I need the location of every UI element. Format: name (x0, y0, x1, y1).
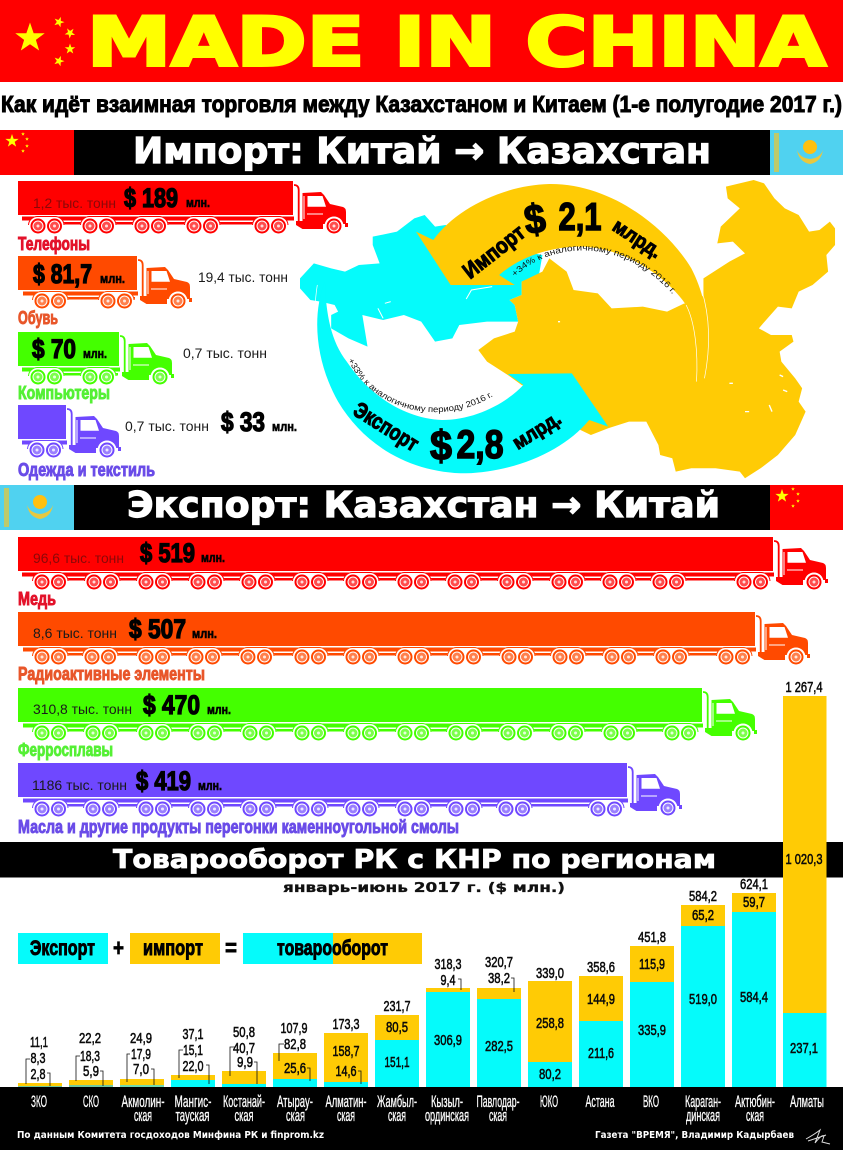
truck: clothing (18, 405, 297, 480)
region labels: ская (746, 1106, 764, 1125)
bar: Атырауская: 25,6 (284, 1061, 306, 1077)
bar: Карагандинская: 65,2 (692, 908, 714, 924)
bar: Жамбылская (375, 999, 419, 1087)
region labels: Акмолин- (122, 1092, 164, 1111)
region labels: ская (286, 1106, 305, 1125)
region labels: ская (489, 1106, 507, 1125)
bar: Алматинская: 14,6 (336, 1064, 356, 1080)
label: footwear: Обувь (18, 308, 58, 328)
region labels: ская (337, 1106, 355, 1125)
bar: Жамбылская: 231,7 (384, 999, 410, 1015)
truck: clothing: 0,7 тыс. тонн (125, 419, 209, 434)
bar: ВКО: 335,9 (638, 1023, 666, 1039)
bar chart (18, 680, 826, 1087)
export amount: Экспорт (349, 397, 424, 456)
truck: computers: млн. (83, 346, 107, 361)
bar: ВКО: 451,8 (638, 930, 666, 946)
import amount: 2,1 (558, 196, 602, 239)
turnover band (0, 842, 843, 878)
truck: radioactive elements: млн. (192, 626, 217, 641)
arrow: export (317, 282, 608, 473)
truck: oils: $ 419 (136, 766, 191, 796)
bar: Карагандинская: 584,2 (689, 889, 717, 905)
truck: phones: млн. (186, 195, 210, 210)
region labels: ЮКО (540, 1092, 558, 1111)
region labels (31, 1092, 824, 1125)
label: clothing: Одежда и текстиль (18, 460, 155, 480)
truck: phones: $ 189 (124, 183, 178, 213)
bar: Мангистауская (171, 1027, 215, 1087)
map: China (478, 180, 835, 478)
legend: = (225, 935, 237, 962)
bar: Карагандинская (681, 889, 725, 1087)
bar: Астана: 211,6 (588, 1046, 614, 1062)
label: computers: Компьютеры (18, 383, 110, 403)
truck: computers (18, 332, 267, 403)
region labels: Мангис- (174, 1092, 212, 1111)
bar: Алматинская (324, 1017, 368, 1087)
bar: Павлодарская: 38,2 (488, 971, 510, 987)
truck: ferroalloys: млн. (207, 702, 231, 717)
truck: copper: 96,6 тыс. тонн (33, 551, 124, 566)
region labels: Алматин- (326, 1092, 366, 1111)
bar: Павлодарская: 282,5 (485, 1039, 513, 1055)
bar: Костанайская: 9,9 (237, 1055, 253, 1071)
bar: Кызылординская: 9,4 (440, 973, 456, 989)
truck: ferroalloys: $ 470 (143, 690, 200, 720)
bar: Актюбинская: 624,1 (740, 877, 768, 893)
bar: ЮКО: 339,0 (536, 966, 564, 982)
bar: Атырауская (273, 1021, 317, 1087)
truck: radioactive elements: 8,6 тыс. тонн (33, 626, 117, 641)
bar: Алматы: 1 267,4 (786, 680, 822, 696)
region labels: ская (134, 1106, 152, 1125)
bar: Акмолинская: 7,0 (133, 1062, 149, 1078)
import amount: $ (521, 195, 549, 243)
truck: copper (18, 537, 828, 609)
bar: Актюбинская: 59,7 (743, 895, 765, 911)
bar: Атырауская: 82,8 (284, 1037, 306, 1053)
signature (806, 1130, 830, 1144)
bar: Павлодарская (477, 955, 521, 1087)
region labels: ская (388, 1106, 406, 1125)
truck: clothing: млн. (272, 419, 297, 434)
bar: Астана: 358,6 (587, 960, 615, 976)
legend: Экспорт (30, 937, 95, 960)
truck: oils: 1186 тыс. тонн (32, 778, 127, 793)
truck: ferroalloys (18, 688, 757, 760)
credit: Газета "ВРЕМЯ", Владимир Кадырбаев (595, 1130, 794, 1141)
bar: Костанайская: 50,8 (233, 1025, 255, 1041)
region labels: Жамбыл- (377, 1092, 417, 1111)
export amount (349, 397, 565, 469)
import amount: млрд. (608, 215, 666, 263)
region labels: ВКО (643, 1092, 659, 1111)
bar: Мангистауская: 22,0 (182, 1059, 204, 1075)
period subtitle: январь-июнь 2017 г. ($ млн.) (283, 881, 565, 896)
bar: ЗКО (18, 1035, 62, 1087)
bar: Акмолинская: 17,9 (131, 1047, 151, 1063)
bar: ЗКО: 8,3 (30, 1051, 46, 1067)
truck: ferroalloys: 310,8 тыс. тонн (33, 702, 132, 717)
import amount (458, 195, 666, 284)
bar: ВКО (630, 930, 674, 1087)
region labels: Астана (586, 1092, 615, 1111)
bar: СКО: 22,2 (79, 1031, 101, 1047)
region labels: Атырау- (277, 1092, 313, 1111)
bar: СКО (69, 1031, 113, 1087)
bar: Костанайская: 40,7 (233, 1041, 255, 1057)
arrow: import (416, 184, 708, 383)
map: Kazakhstan (300, 215, 542, 347)
region labels: тауская (176, 1106, 210, 1125)
bar: СКО: 5,9 (83, 1064, 99, 1080)
legend: импорт (143, 937, 203, 960)
bar: Астана (579, 960, 623, 1087)
bar: Жамбылская: 151,1 (384, 1055, 410, 1071)
region labels: Павлодар- (476, 1092, 520, 1111)
region labels: СКО (83, 1092, 99, 1111)
label: ferroalloys: Ферросплавы (18, 740, 113, 760)
truck: footwear: млн. (100, 271, 125, 286)
label: oils: Масла и другие продукты перегонки каменноугольной смолы (18, 817, 459, 837)
bar: Кызылординская: 306,9 (434, 1033, 462, 1049)
export amount: 2,8 (456, 423, 504, 467)
truck: radioactive elements: $ 507 (129, 614, 186, 644)
bar: Алматы: 1 020,3 (786, 852, 822, 868)
region labels: динская (686, 1106, 720, 1125)
bar: СКО: 18,3 (80, 1049, 100, 1065)
region labels: Караган- (685, 1092, 721, 1111)
truck: phones: 1,2 тыс. тонн (33, 196, 116, 211)
header banner (0, 0, 843, 82)
map: Kazakhstan and China with arrows (300, 180, 836, 478)
turnover heading: Товарооборот РК с КНР по регионам (113, 845, 716, 875)
bar: Павлодарская: 320,7 (485, 955, 513, 971)
region labels: Актюбин- (735, 1092, 775, 1111)
truck: copper: млн. (201, 550, 225, 565)
export amount: млрд. (509, 408, 565, 454)
bar: ЮКО (528, 966, 572, 1087)
icon: flag stars (15, 15, 78, 67)
bar: Алматинская: 173,3 (332, 1017, 360, 1033)
import heading: Импорт: Китай → Казахстан (133, 131, 711, 172)
legend (18, 933, 422, 964)
truck: footwear (18, 256, 288, 328)
bar: ЗКО: 2,8 (30, 1067, 46, 1083)
bar: Кызылординская: 318,3 (434, 957, 462, 973)
bar: Алматы: 237,1 (790, 1041, 818, 1057)
bar: Атырауская: 107,9 (280, 1021, 308, 1037)
export amount: $ (430, 422, 452, 469)
export growth note: +33% к аналогичному периоду 2016 г. (350, 359, 492, 414)
label: copper: Медь (18, 589, 56, 609)
bar: Костанайская (222, 1025, 266, 1087)
bar: Актюбинская (732, 877, 776, 1087)
bar: Жамбылская: 80,5 (386, 1020, 408, 1036)
bar: Кызылординская (426, 957, 470, 1087)
bar: Астана: 144,9 (587, 992, 615, 1008)
bar: Алматы (783, 680, 826, 1087)
truck: clothing: $ 33 (221, 407, 265, 437)
legend: + (113, 935, 124, 962)
footer band (0, 1087, 843, 1150)
truck: phones (18, 181, 348, 254)
export band (0, 485, 843, 530)
bar: Карагандинская: 519,0 (689, 992, 717, 1008)
bar: ЗКО: 11,1 (30, 1035, 48, 1051)
region labels: ЗКО (31, 1092, 47, 1111)
bar: Мангистауская: 15,1 (183, 1043, 203, 1059)
bar: ВКО: 115,9 (639, 957, 665, 973)
truck: footwear: $ 81,7 (33, 259, 92, 289)
source note: По данным Комитета госдоходов Минфина РК и finprom.kz (17, 1130, 324, 1141)
import amount: Импорт (458, 219, 530, 284)
bar: ЮКО: 80,2 (539, 1067, 561, 1083)
truck: footwear: 19,4 тыс. тонн (198, 270, 288, 285)
bar: Акмолинская: 24,9 (130, 1031, 152, 1047)
legend: товарооборот (277, 937, 388, 960)
label: phones: Телефоны (18, 234, 90, 254)
region labels: ская (234, 1106, 254, 1125)
bar: Мангистауская: 37,1 (182, 1027, 204, 1043)
region labels: ординская (425, 1106, 469, 1125)
truck: computers: $ 70 (32, 334, 76, 364)
import band (0, 130, 843, 175)
bar: Акмолинская (120, 1031, 164, 1087)
bar: Алматинская: 158,7 (332, 1044, 360, 1060)
bar: Актюбинская: 584,4 (740, 990, 768, 1006)
truck: computers: 0,7 тыс. тонн (183, 346, 267, 361)
bar: ЮКО: 258,8 (536, 1016, 564, 1032)
region labels: Костанай- (223, 1092, 265, 1111)
import growth note: +34% к аналогичному периоду 2016 г. (513, 246, 675, 294)
title: MADE IN CHINA (87, 4, 826, 82)
region labels: Кызыл- (431, 1092, 463, 1111)
truck: oils (18, 763, 682, 837)
truck: oils: млн. (198, 778, 222, 793)
label: radioactive elements: Радиоактивные элементы (18, 664, 205, 684)
export heading: Экспорт: Казахстан → Китай (127, 485, 720, 526)
truck: copper: $ 519 (140, 538, 195, 568)
truck: radioactive elements (18, 612, 810, 684)
